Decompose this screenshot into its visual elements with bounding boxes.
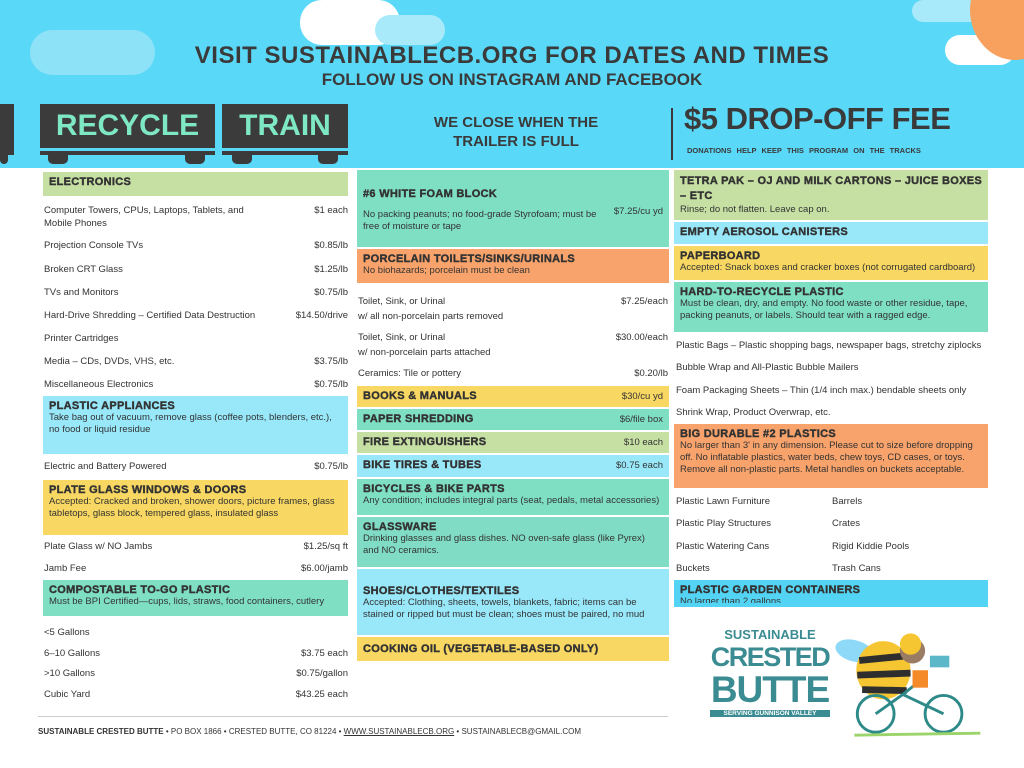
plastic appliances: Take bag out of vacuum, remove glass (coffee pots, blenders, etc.), no food or liquid residue [49,412,332,435]
big durable [674,424,988,488]
divider [671,108,673,160]
compostable [43,580,348,616]
electronics rows: Computer Towers, CPUs, Laptops, Tablets, and [44,205,244,216]
glassware: GLASSWARE [363,521,437,533]
electronics header [43,172,348,196]
fire extinguishers [357,432,669,453]
LEFT COLUMN: $0.75/lb [314,287,348,298]
logo: BUTTE [711,669,829,710]
LEFT COLUMN: $1.25/sq ft [304,541,348,552]
paperboard [674,246,988,280]
tetra pak: Rinse; do not flatten. Leave cap on. [680,204,829,215]
LEFT COLUMN: >10 Gallons [44,668,95,679]
plastic appliances [43,396,348,454]
RIGHT COLUMN [674,170,988,607]
heading: VISIT SUSTAINABLECB.ORG FOR DATES AND TIMES [195,42,829,69]
fire extinguishers: FIRE EXTINGUISHERS [363,436,486,448]
MIDDLE COLUMN: Toilet, Sink, or Urinal [358,332,445,343]
train logo: RECYCLE [56,109,199,142]
LEFT COLUMN: Cubic Yard [44,689,90,700]
LEFT COLUMN [43,172,348,700]
foam block: #6 WHITE FOAM BLOCK [363,188,497,200]
bicycles [357,479,669,515]
paper shredding [357,409,669,430]
electronics rows: $1 each [314,205,348,216]
cooking oil: COOKING OIL (VEGETABLE-BASED ONLY) [363,643,599,655]
big durable: No larger than 3' in any dimension. Please cut to size before dropping off. No inflatable plastics, water beds, chew toys, CD cases, or toys. Remove all non-plastic parts. Metal handles on buckets acceptable. [680,440,973,475]
electronics header: ELECTRONICS [49,176,131,188]
porcelain: No biohazards; porcelain must be clean [363,265,530,276]
foam block [357,170,669,247]
LEFT COLUMN: Hard-Drive Shredding – Certified Data Destruction [44,310,255,321]
close notice: TRAILER IS FULL [453,133,579,150]
RIGHT COLUMN: Rigid Kiddie Pools [832,541,909,552]
glassware [357,517,669,567]
LEFT COLUMN: Printer Cartridges [44,333,118,344]
RIGHT COLUMN: Shrink Wrap, Product Overwrap, etc. [676,407,831,418]
LEFT COLUMN: 6–10 Gallons [44,648,100,659]
shoes: Accepted: Clothing, sheets, towels, blankets, fabric; items can be stained or ripped but must be clean; shoes must be paired, no mud [363,597,644,620]
hard to recycle: Must be clean, dry, and empty. No food waste or other residue, tape, packing peanuts, or labels. Should tear with a ragged edge. [680,298,967,321]
plate glass [43,480,348,535]
LEFT COLUMN: $14.50/drive [296,310,348,321]
RIGHT COLUMN: Plastic Bags – Plastic shopping bags, newspaper bags, stretchy ziplocks [676,340,981,351]
compostable: COMPOSTABLE TO-GO PLASTIC [49,584,230,596]
footer rule [38,716,668,717]
LEFT COLUMN: $0.85/lb [314,240,348,251]
fee: $5 DROP-OFF FEE [684,101,950,136]
MIDDLE COLUMN: $0.20/lb [634,368,668,379]
plate glass: PLATE GLASS WINDOWS & DOORS [49,484,246,496]
close notice: WE CLOSE WHEN THE [434,114,598,131]
logo: CRESTED [711,642,829,672]
LEFT COLUMN: Media – CDs, DVDs, VHS, etc. [44,356,174,367]
bike tires: $0.75 each [616,460,663,471]
bike tires [357,455,669,477]
LEFT COLUMN: $0.75/lb [314,379,348,390]
foam block: No packing peanuts; no food-grade Styrofoam; must be free of moisture or tape [363,209,596,232]
porcelain: PORCELAIN TOILETS/SINKS/URINALS [363,253,575,265]
fee note: DONATIONS HELP KEEP THIS PROGRAM ON THE TRACKS [687,146,921,155]
aerosol [674,222,988,244]
RIGHT COLUMN: Buckets [676,563,710,574]
sky header background [0,0,1024,168]
LEFT COLUMN: $0.75/lb [314,461,348,472]
train logo [0,104,348,164]
plastic appliances: PLASTIC APPLIANCES [49,400,175,412]
garden containers [674,580,988,607]
fire extinguishers: $10 each [624,437,663,448]
RIGHT COLUMN: Foam Packaging Sheets – Thin (1/4 inch max.) bendable sheets only [676,385,966,396]
bee on bike illustration [836,633,980,737]
glassware: Drinking glasses and glass dishes. NO oven-safe glass (like Pyrex) and NO ceramics. [363,533,645,556]
RIGHT COLUMN: Plastic Play Structures [676,518,771,529]
logo: SERVING GUNNISON VALLEY [724,710,816,717]
electronics rows [44,205,348,229]
paper shredding: PAPER SHREDDING [363,413,474,425]
electronics rows: Mobile Phones [44,218,107,229]
train logo: TRAIN [239,109,331,142]
LEFT COLUMN: TVs and Monitors [44,287,118,298]
compostable: Must be BPI Certified—cups, lids, straws, food containers, cutlery [49,596,324,607]
RIGHT COLUMN: Barrels [832,496,862,507]
MIDDLE COLUMN: w/ non-porcelain parts attached [358,347,491,358]
books: BOOKS & MANUALS [363,390,477,402]
MIDDLE COLUMN [357,170,669,661]
cooking oil [357,637,669,661]
LEFT COLUMN: $6.00/jamb [301,563,348,574]
MIDDLE COLUMN: w/ all non-porcelain parts removed [358,311,503,322]
LEFT COLUMN: Electric and Battery Powered [44,461,167,472]
footer: SUSTAINABLE CRESTED BUTTE • PO BOX 1866 • CRESTED BUTTE, CO 81224 • WWW.SUSTAINABLECB.ORG • SUSTAINABLECB@GMAIL.COM [38,727,581,736]
LEFT COLUMN: Miscellaneous Electronics [44,379,153,390]
LEFT COLUMN: <5 Gallons [44,627,90,638]
shoes [357,569,669,635]
RIGHT COLUMN: Trash Cans [832,563,881,574]
hard to recycle: HARD-TO-RECYCLE PLASTIC [680,286,844,298]
RIGHT COLUMN: Plastic Lawn Furniture [676,496,770,507]
LEFT COLUMN: $43.25 each [296,689,348,700]
MIDDLE COLUMN: Toilet, Sink, or Urinal [358,296,445,307]
logo [710,627,830,717]
foam block: $7.25/cu yd [614,206,663,217]
tetra pak [674,170,988,220]
LEFT COLUMN: Projection Console TVs [44,240,143,251]
LEFT COLUMN: Jamb Fee [44,563,86,574]
MIDDLE COLUMN: $7.25/each [621,296,668,307]
LEFT COLUMN: $3.75/lb [314,356,348,367]
clouds [30,0,1024,75]
RIGHT COLUMN: Plastic Watering Cans [676,541,769,552]
RIGHT COLUMN: Bubble Wrap and All-Plastic Bubble Mailers [676,362,859,373]
LEFT COLUMN: $3.75 each [301,648,348,659]
aerosol: EMPTY AEROSOL CANISTERS [680,226,848,238]
subheading: FOLLOW US ON INSTAGRAM AND FACEBOOK [322,70,702,89]
garden containers: PLASTIC GARDEN CONTAINERS [680,584,860,596]
shoes: SHOES/CLOTHES/TEXTILES [363,585,519,597]
porcelain [357,249,669,283]
paperboard: Accepted: Snack boxes and cracker boxes (not corrugated cardboard) [680,262,975,273]
paper shredding: $6/file box [620,414,663,425]
LEFT COLUMN: Plate Glass w/ NO Jambs [44,541,152,552]
bicycles: BICYCLES & BIKE PARTS [363,483,505,495]
RIGHT COLUMN: Crates [832,518,860,529]
MIDDLE COLUMN: $30.00/each [616,332,668,343]
LEFT COLUMN: $0.75/gallon [296,668,348,679]
close notice [434,114,598,150]
books [357,386,669,407]
LEFT COLUMN: $1.25/lb [314,264,348,275]
logo: SUSTAINABLE [724,627,816,642]
MIDDLE COLUMN: Ceramics: Tile or pottery [358,368,461,379]
big durable: BIG DURABLE #2 PLASTICS [680,428,836,440]
plate glass: Accepted: Cracked and broken, shower doors, picture frames, glass tabletops, glass block, tempered glass, insulated glass [49,496,335,519]
tetra pak: TETRA PAK – OJ AND MILK CARTONS – JUICE BOXES – ETC [680,175,982,202]
LEFT COLUMN: Broken CRT Glass [44,264,123,275]
bike tires: BIKE TIRES & TUBES [363,459,481,471]
paperboard: PAPERBOARD [680,250,760,262]
hard to recycle [674,282,988,332]
books: $30/cu yd [622,391,663,402]
bicycles: Any condition; includes integral parts (seat, pedals, metal accessories) [363,495,659,506]
